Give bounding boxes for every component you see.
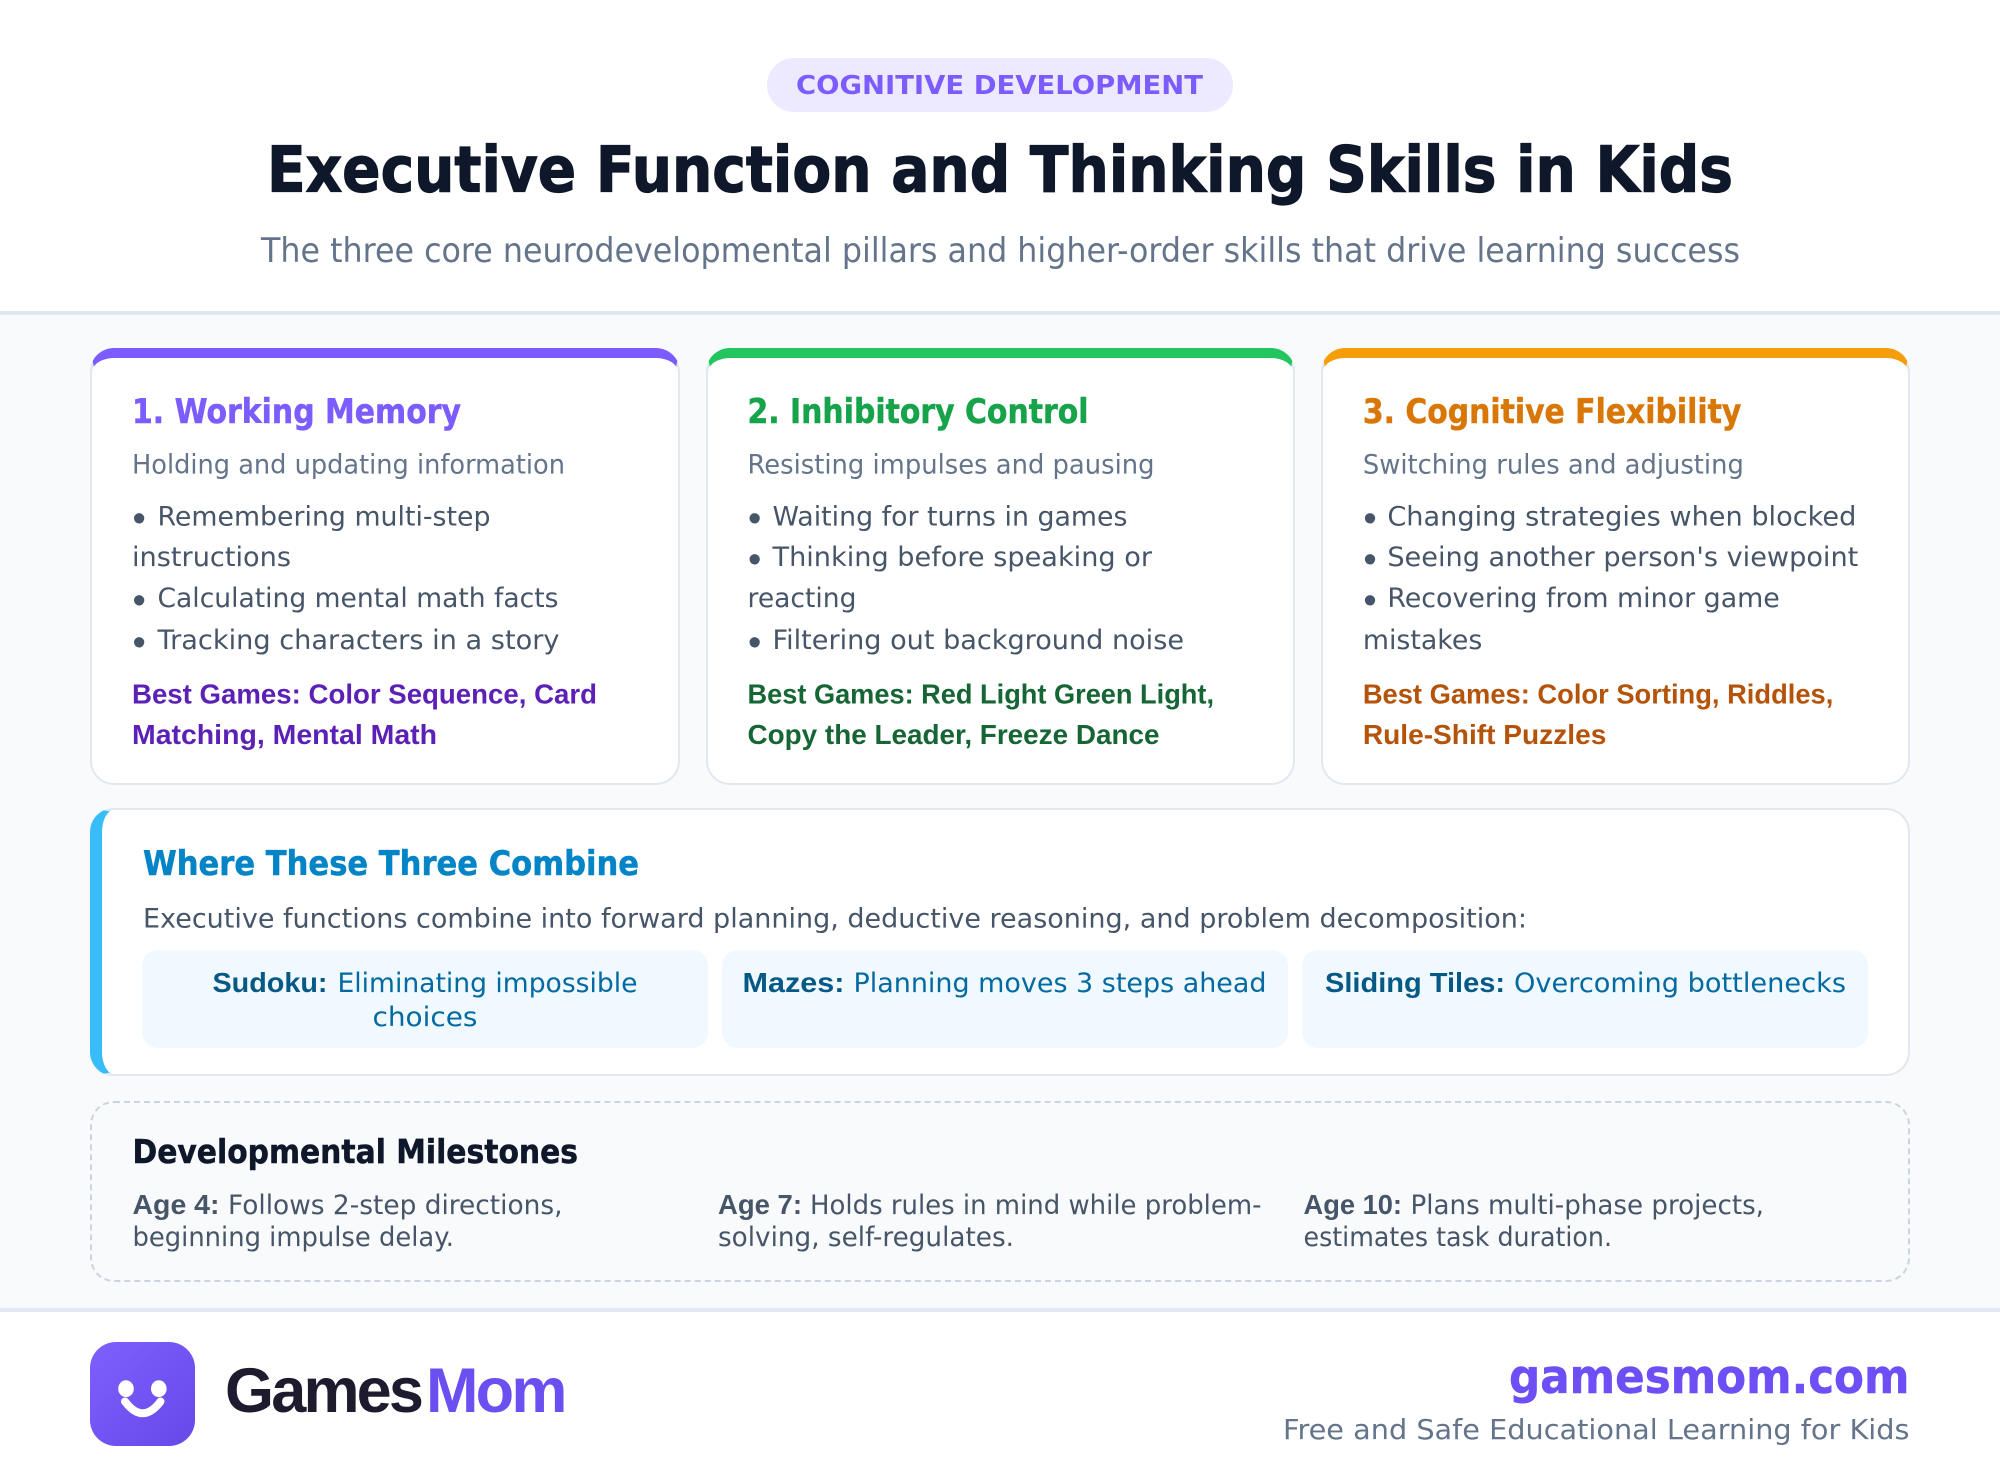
best games [132,678,597,750]
heading: 1. Working Memory [132,392,461,432]
skill list: Tracking characters in a story [156,625,560,656]
panel: where these three combine [90,808,1910,1076]
best games [748,678,1214,750]
example: mazes: Planning moves 3 steps ahead [854,968,1266,999]
example: sudoku: choices [372,1002,478,1033]
category pill: COGNITIVE DEVELOPMENT [796,71,1203,101]
subheading: Resisting impulses and pausing [748,450,1154,480]
title: Executive Function and Thinking Skills in Kids [267,134,1733,206]
brand name: Mom [426,1356,565,1426]
milestone: age 10: Plans multi-phase projects, [1410,1190,1764,1221]
best games: Rule-Shift Puzzles [1362,719,1606,750]
subheading: Holding and updating information [132,450,565,480]
skill list: • [1363,580,1376,622]
milestone: age 7: solving, self-regulates. [718,1222,1014,1253]
milestone: age 7: Holds rules in mind while problem- [810,1190,1262,1221]
skill list: Calculating mental math facts [158,583,558,614]
skill list: mistakes [1362,625,1482,656]
skill list: • [748,622,761,664]
footer [0,1308,2000,1478]
best games: Matching, Mental Math [132,719,437,750]
panel: developmental milestones [90,1101,1910,1282]
example: sliding tiles: Sliding Tiles: [1325,967,1505,998]
website: gamesmom.com [1509,1350,1910,1405]
skill list: Thinking before speaking or [771,542,1153,573]
example: sudoku: Sudoku: [212,967,328,998]
skill list: • [132,580,146,622]
best games [1362,678,1833,750]
milestone: age 4 [132,1189,562,1253]
skill list: • [132,498,146,540]
skill list: Waiting for turns in games [772,502,1128,532]
example: sudoku [142,950,708,1048]
skill list: • [748,498,761,540]
skill list: instructions [132,542,291,573]
header panel [0,0,2000,315]
skill list: Remembering multi-step [158,502,490,532]
milestone: age 10 [1304,1189,1764,1253]
panel: working memory [90,348,680,785]
skill list: Filtering out background noise [772,625,1184,656]
skill list: • [132,622,146,664]
heading: 2. Inhibitory Control [748,392,1088,432]
skill list [132,498,560,664]
brand name [225,1356,565,1426]
example: sudoku: Eliminating impossible [338,968,638,999]
example: mazes: Mazes: [742,967,844,998]
example: sliding tiles [1302,950,1868,1048]
skill list: reacting [748,583,856,614]
subheading: Switching rules and adjusting [1362,450,1743,480]
intro text: Executive functions combine into forward planning, deductive reasoning, and problem decomposition: [143,904,1527,934]
milestone: age 10: Age 10: [1304,1189,1402,1220]
skill list: Recovering from minor game [1387,583,1779,614]
skill list [748,498,1184,664]
example: mazes [722,950,1288,1048]
skill list: • [748,539,761,581]
skill list: Changing strategies when blocked [1387,502,1856,532]
tagline: Free and Safe Educational Learning for Kids [1283,1413,1910,1446]
skill list [1362,498,1858,656]
brand name: Games [225,1356,422,1426]
milestone: age 7 [718,1189,1262,1253]
subtitle: The three core neurodevelopmental pillars and higher-order skills that drive learning success [260,231,1740,271]
heading: Developmental Milestones [132,1132,578,1171]
category pill [767,58,1233,112]
milestone: age 4: beginning impulse delay. [132,1222,454,1253]
skill list: • [1363,498,1376,540]
best games: Best Games: Color Sorting, Riddles, [1362,678,1833,710]
icon: smiling logo [90,1342,195,1446]
best games: Copy the Leader, Freeze Dance [748,719,1160,750]
example: sliding tiles: Overcoming bottlenecks [1514,968,1846,999]
heading: 3. Cognitive Flexibility [1362,392,1741,432]
panel: cognitive flexibility [1321,348,1910,785]
milestone: age 4: Follows 2-step directions, [228,1190,562,1221]
heading: Where These Three Combine [143,844,639,884]
best games: Best Games: Red Light Green Light, [748,678,1214,710]
milestone: age 4: Age 4: [132,1189,220,1220]
skill list: • [1363,539,1376,581]
skill list: Seeing another person's viewpoint [1387,542,1858,573]
milestone: age 10: estimates task duration. [1304,1222,1612,1253]
milestone: age 7: Age 7: [718,1189,802,1220]
panel: inhibitory control [706,348,1295,785]
best games: Best Games: Color Sequence, Card [132,678,597,710]
